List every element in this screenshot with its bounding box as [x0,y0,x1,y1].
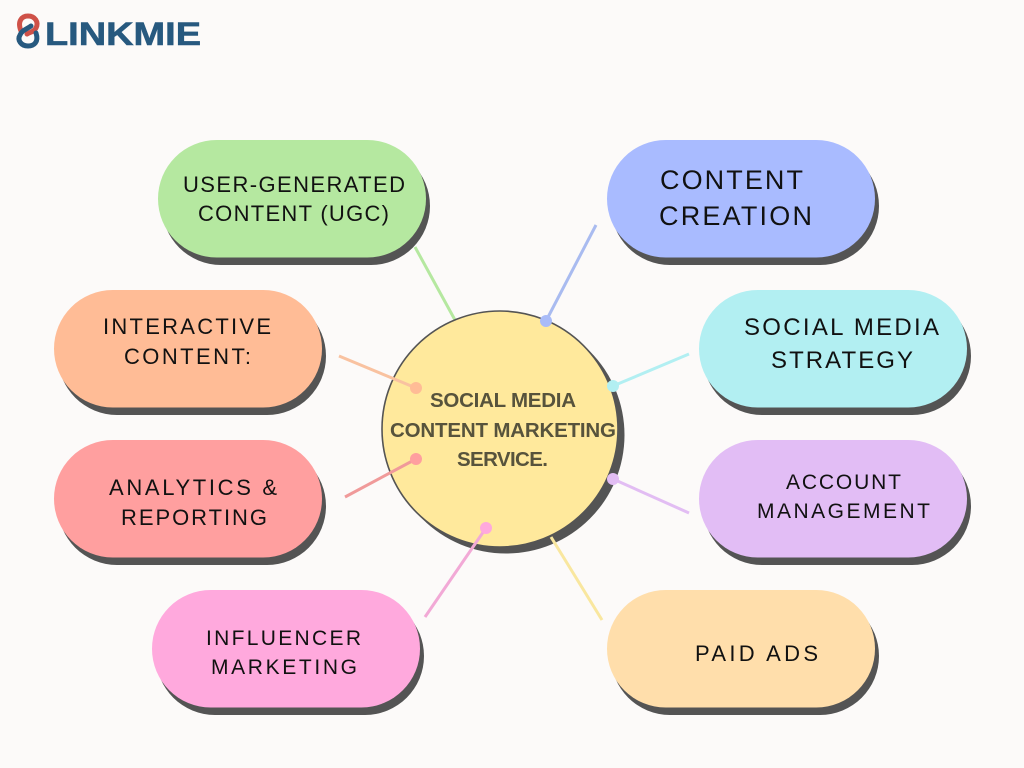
logo: Linkmie: LINKMIE [45,16,201,52]
pill: analytics and reporting: ANALYTICS & [109,475,277,500]
pill: influencer marketing: MARKETING [211,656,357,679]
pill: interactive content: CONTENT: [124,344,251,369]
pill: influencer marketing: INFLUENCER [206,627,361,650]
pill: social media strategy: STRATEGY [771,347,913,374]
pill: content creation: CREATION [659,201,812,231]
pill: user-generated content: CONTENT (UGC) [198,201,389,226]
center circle shadow [388,316,624,554]
connector: analytics and reporting [345,453,422,497]
pill: paid ads: PAID ADS [695,641,818,666]
connector: paid ads [551,537,602,620]
pill: content creation [607,140,879,265]
pill: paid ads [607,590,879,715]
connector: user-generated content [415,247,455,320]
connector: interactive content [339,356,422,394]
pill: analytics and reporting [54,440,326,565]
center label: SERVICE. [457,448,548,471]
pill: influencer marketing [152,590,424,715]
pill: social media strategy: SOCIAL MEDIA [744,314,939,341]
center label: SOCIAL MEDIA [430,389,576,412]
pill: social media strategy [699,290,971,415]
connector: content creation [540,225,596,327]
pill: content creation: CONTENT [660,165,803,195]
pill: account management: ACCOUNT [786,471,901,494]
pill: interactive content [54,290,326,415]
pill: account management [699,440,971,565]
pill: interactive content: INTERACTIVE [103,314,271,339]
pill: analytics and reporting: REPORTING [121,505,267,530]
pill: user-generated content: USER-GENERATED [183,172,405,197]
center circle [382,311,618,547]
pill: user-generated content [158,140,430,265]
center label: CONTENT MARKETING [390,419,616,442]
connector: social media strategy [607,354,689,392]
pill: account management: MANAGEMENT [757,500,930,523]
connector: influencer marketing [425,522,492,617]
connector: account management [607,473,689,513]
